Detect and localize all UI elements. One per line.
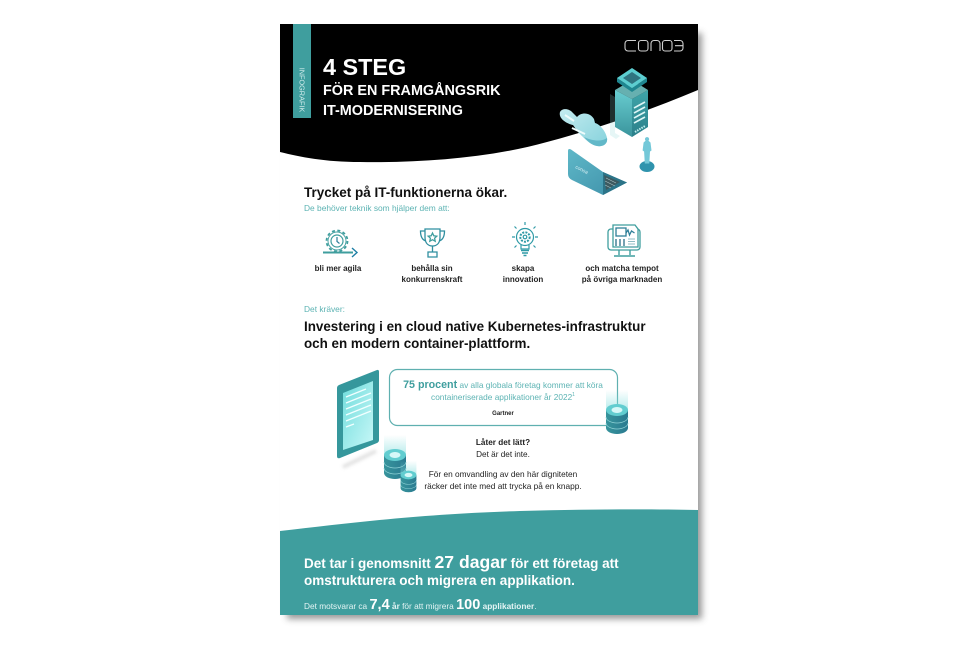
text: sounds easy: Låter det lätt? [476,438,530,447]
label: market pace: på övriga marknaden [582,275,662,284]
callout text: 75 procent av alla globala företag kommer att köra [403,379,603,391]
label: market pace [582,264,662,284]
title: IT-MODERNISERING [323,102,463,118]
laptop: conoa [574,164,589,176]
title [323,54,500,118]
logo [625,40,683,51]
page shadow [287,33,702,619]
text: transformation: räcker det inte med att trycka på en knapp. [424,481,582,491]
text: transformation [424,469,582,491]
callout box [390,370,618,426]
teal footer band [280,509,698,615]
icon: clock gear with arrow [323,230,357,257]
heading: investment: Investering i en cloud native Kubernetes-infrastruktur [304,319,646,334]
footer statement: omstrukturera och migrera en applikation. [304,573,575,588]
text: transformation: För en omvandling av den här digniteten [429,469,577,479]
footer statement: Det tar i genomsnitt 27 dagar för ett företag att [304,552,619,572]
footer statement [304,552,619,588]
heading: investment [304,319,646,351]
tab label: INFOGRAFIK [298,68,307,112]
subheading: De behöver teknik som hjälper dem att: [304,203,450,213]
label: competitiveness: behålla sin [411,264,453,273]
page background [280,24,698,615]
side tab [293,24,311,118]
callout text [403,379,603,402]
label: competitiveness: konkurrenskraft [402,275,462,284]
server tower [610,68,648,139]
label: agile: bli mer agila [315,264,361,273]
footer detail: Det motsvarar ca 7,4 år för att migrera 100 applikationer. [304,597,537,613]
source: Gartner [492,411,514,417]
callout text: containeriserade applikationer år 20221 [431,392,575,402]
label: innovation: innovation [503,275,543,284]
label: innovation [503,264,543,284]
text: sounds easy: Det är det inte. [476,450,530,458]
icon: lightbulb with gear [512,222,538,256]
figure on pedestal [640,137,654,172]
cloud [560,109,607,146]
title: FÖR EN FRAMGÅNGSRIK [323,83,500,99]
label: requires: Det kräver: [304,304,345,314]
label: competitiveness [402,264,462,284]
heading: pressure: Trycket på IT-funktionerna ökar. [304,185,507,200]
title: 4 STEG [323,54,406,80]
text: sounds easy [476,438,530,458]
black header with curve [280,24,698,162]
icon: trophy [420,229,444,257]
icon: database disks [384,390,628,492]
icon: tablet [337,370,379,467]
heading: investment: och en modern container-plattform. [304,336,530,350]
label: market pace: och matcha tempot [585,264,659,273]
label: innovation: skapa [512,264,534,273]
illustration: server tower, cloud, laptop, figure [560,68,654,195]
icon: monitor with dashboard [608,225,640,256]
